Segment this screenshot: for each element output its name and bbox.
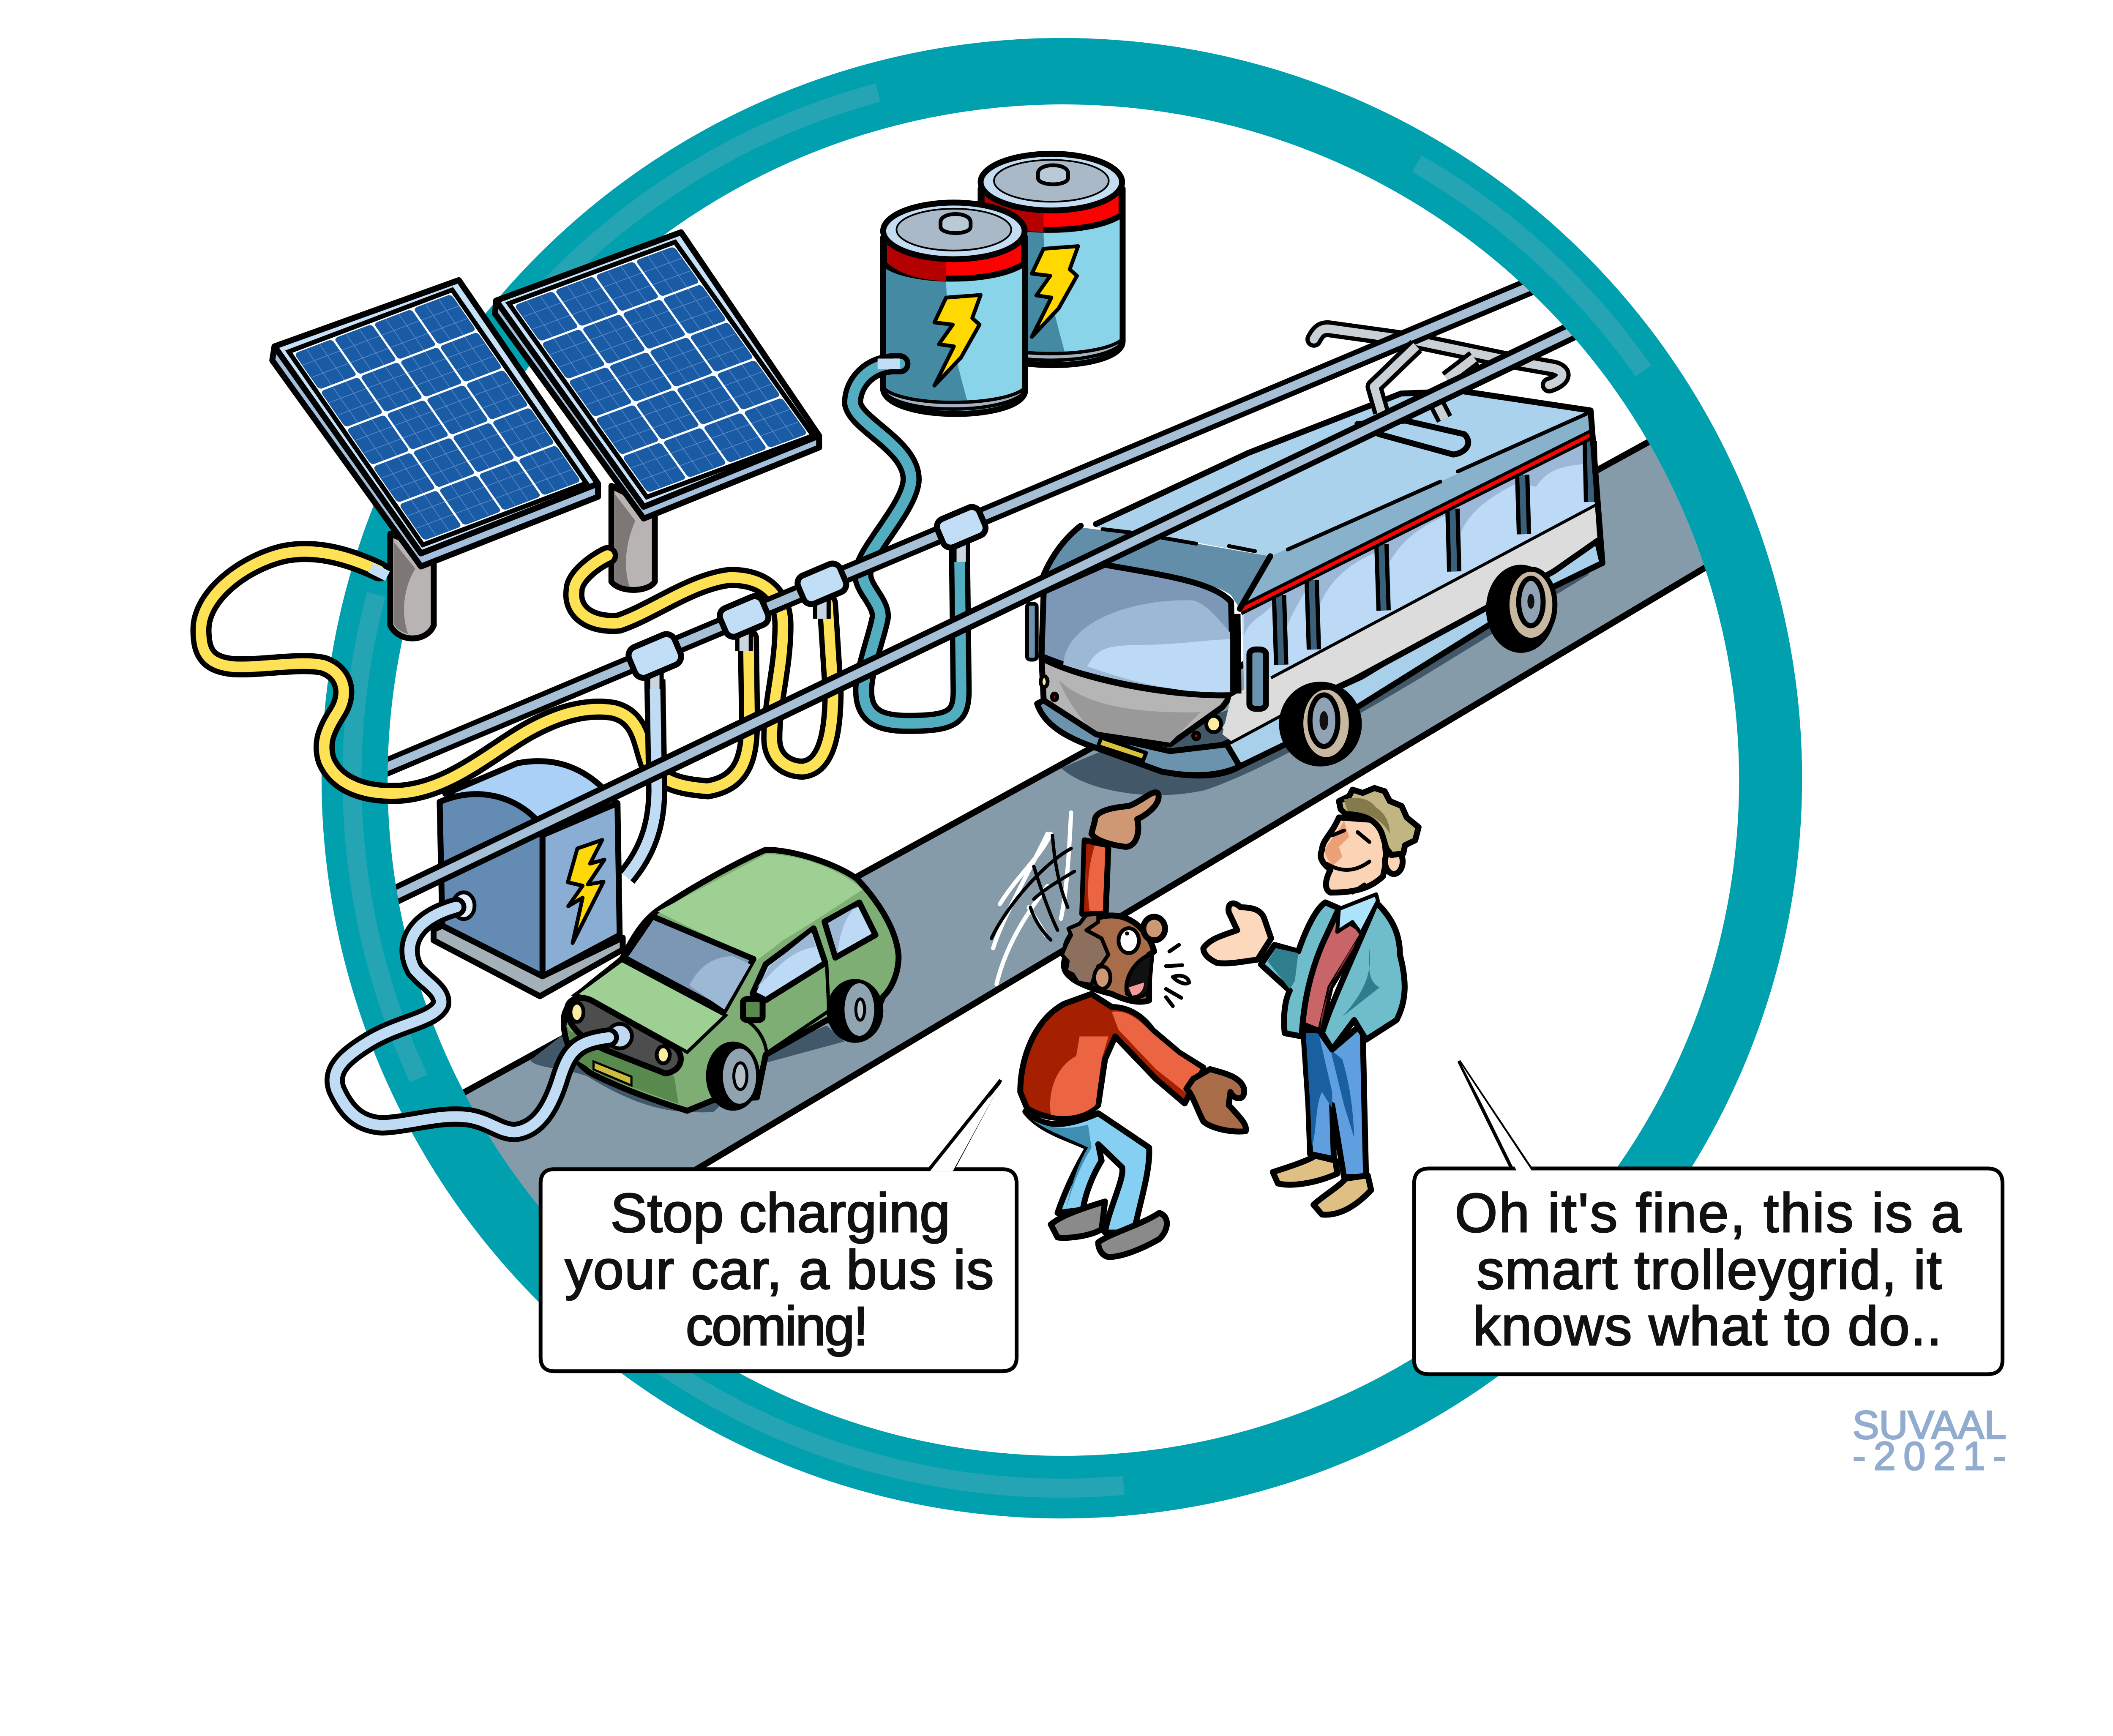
car front wheel (706, 1042, 760, 1111)
lower ear (1094, 966, 1111, 989)
signature (1853, 1403, 2007, 1478)
ear (1385, 849, 1403, 874)
panel frame (495, 232, 819, 519)
motion lines (991, 813, 1075, 984)
cabinet base (434, 925, 623, 996)
bubble box (541, 1169, 1017, 1371)
open hand (1203, 903, 1271, 964)
car rear wheel (827, 979, 883, 1043)
bubble tail (1459, 1061, 1534, 1173)
speech bubble left: your car, a bus is (565, 1239, 994, 1301)
pole base (1357, 420, 1468, 455)
bus shadow (1061, 541, 1589, 795)
charging cabinet (434, 761, 623, 996)
hair (1339, 788, 1419, 855)
car mirror (743, 999, 763, 1020)
front side window (753, 928, 825, 1000)
speech bubble left: coming! (685, 1295, 868, 1357)
rear battery (980, 154, 1123, 365)
sweater (1300, 912, 1364, 1032)
car shadow (530, 1026, 844, 1112)
cable tip (878, 358, 900, 369)
mouth (1126, 953, 1152, 997)
car body (564, 850, 898, 1111)
cabinet top (445, 761, 617, 836)
yellow cable from right panel (574, 556, 833, 769)
front wheel (1279, 682, 1362, 767)
cabinet socket (453, 893, 475, 919)
car number plate (593, 1062, 631, 1086)
cabinet left face (440, 794, 543, 976)
upper overhead wire (364, 275, 1556, 776)
speech bubble right (1414, 1061, 2003, 1374)
A pillar (1236, 614, 1237, 693)
trousers (1303, 1024, 1366, 1177)
face (1321, 817, 1387, 893)
window pillars (1279, 441, 1591, 665)
wire clamps (626, 505, 988, 689)
solar panel right (495, 232, 819, 590)
window shading (1244, 438, 1591, 639)
roof (658, 854, 863, 960)
panel frame (272, 280, 598, 567)
hair (1062, 914, 1108, 985)
front lower panel (565, 1023, 679, 1104)
front bumper (1037, 700, 1240, 775)
sweater (1020, 994, 1203, 1118)
clamp 2 (717, 594, 771, 639)
raised sleeve (1082, 840, 1108, 914)
front roof cap (1044, 527, 1270, 609)
teal battery cable (852, 364, 961, 723)
roof edge lines (1096, 391, 1602, 563)
clamp stubs (655, 539, 961, 689)
shouting man (991, 792, 1246, 1257)
door line (748, 964, 829, 1052)
head (1064, 915, 1154, 1002)
corner panel (1222, 677, 1288, 741)
front black panel (567, 998, 681, 1073)
front mask (1042, 658, 1231, 744)
shoes (1273, 1156, 1337, 1185)
number plate (1098, 737, 1146, 761)
lower hand (1186, 1069, 1246, 1132)
light blue car cable (335, 907, 609, 1132)
front battery (883, 202, 1025, 414)
solar cells (289, 290, 586, 545)
rear wheel (1486, 565, 1556, 653)
road (462, 439, 1706, 1206)
bubble box (1414, 1168, 2003, 1374)
upper ear (1143, 917, 1165, 940)
trolleybus (1027, 391, 1602, 795)
car headlights (571, 1003, 584, 1022)
cabinet right face (543, 803, 620, 976)
right headlight (1206, 716, 1221, 732)
trousers (1025, 1111, 1149, 1233)
lower overhead wire (364, 311, 1613, 910)
shoes (1051, 1201, 1105, 1238)
bubble text: Stop charging (610, 1182, 950, 1244)
batteries (883, 154, 1123, 414)
speech bubble right: knows what to do.. (1473, 1295, 1942, 1357)
post (390, 534, 434, 639)
bubble tail (926, 1080, 1001, 1173)
hood (575, 960, 726, 1052)
roof top (1096, 391, 1584, 556)
shirt collar (1337, 894, 1378, 934)
solar panel left (272, 280, 598, 639)
bubble text: Oh it's fine, this is a (1455, 1182, 1962, 1244)
calm man (1203, 788, 1419, 1215)
clamp 4 (934, 505, 988, 550)
trolley cross bar (1314, 329, 1562, 385)
side roof band (1240, 412, 1592, 609)
mirrors (1249, 650, 1266, 709)
left jacket (1261, 902, 1339, 1037)
speech bubble right: smart trolleygrid, it (1477, 1239, 1942, 1301)
shout marks (1166, 945, 1189, 1006)
solar cells (509, 242, 813, 497)
left headlight (1040, 676, 1048, 687)
clamp 1 (626, 631, 684, 681)
yellow cable from left panel (201, 551, 750, 794)
side windows (1242, 434, 1595, 693)
light blue cable from first clamp (626, 680, 657, 877)
trolley poles (1357, 346, 1474, 455)
post (612, 486, 655, 590)
pointing hand (1092, 792, 1159, 847)
red stripe (1240, 434, 1592, 611)
clamp 3 (795, 561, 849, 607)
green car (530, 850, 898, 1112)
smile and eyes (1327, 830, 1369, 893)
lower side band (1161, 541, 1602, 775)
eye (1119, 928, 1139, 953)
car charge port (607, 1024, 632, 1048)
rear side window (824, 903, 876, 958)
right jacket (1322, 902, 1405, 1049)
lightning bolt (568, 840, 604, 943)
signature: SUVAAL (1853, 1403, 2007, 1447)
grey body band (1222, 504, 1597, 741)
windshield (1042, 565, 1233, 695)
windshield (624, 916, 753, 1011)
signature: -2021- (1853, 1434, 2007, 1478)
teal ring (322, 38, 1802, 1518)
speech bubble left (541, 1080, 1017, 1371)
